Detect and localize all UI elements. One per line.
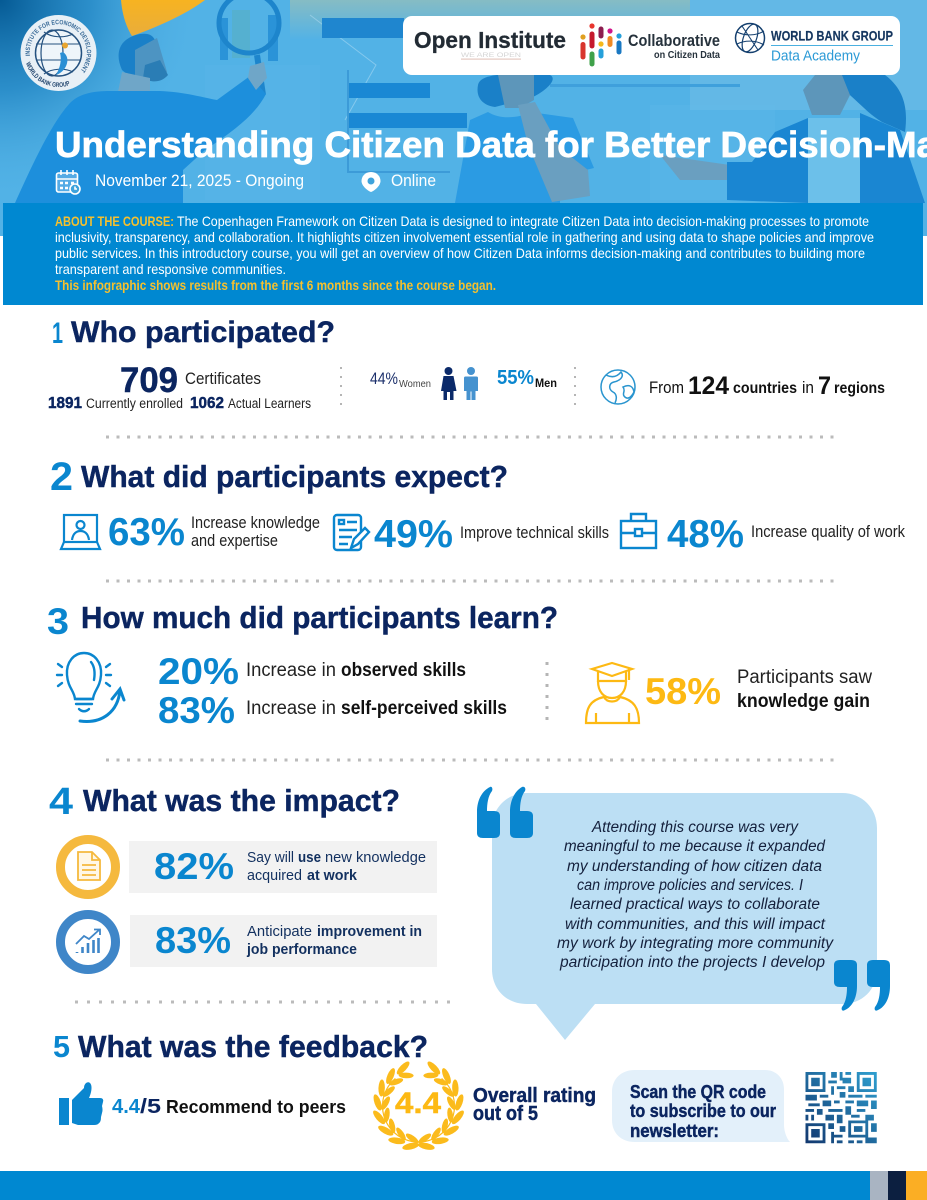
section 2 heading: What did participants expect? [81,459,508,494]
stat: gender split: Women [399,378,431,390]
quote text: participation into the projects I develop [559,954,825,971]
icon: document in yellow ring [60,840,116,894]
stat: observed skills: 20% [158,651,239,692]
logo: World Bank Group Data Academy [736,22,893,64]
stat: increase quality of work: 48% [667,513,744,556]
stat: certificates and enrolment [48,361,311,412]
icon: laptop with person [61,515,100,549]
stat: certificates and enrolment: 1062 [190,395,224,412]
panel: about the course: ABOUT THE COURSE: [55,213,174,229]
stat: gender split: Men [535,378,557,390]
icon: calendar [56,170,80,194]
panel: about the course: transparent and responsive communities. [55,261,286,277]
stat: recommend to peers [59,1082,346,1125]
logo: institute seal [20,15,96,91]
stat: countries and regions: countries [733,380,797,397]
stat: knowledge gain: 58% [645,671,721,712]
logo: Open Institute: WE ARE OPEN [461,53,521,59]
overall rating label: out of 5 [473,1103,538,1125]
logo: institute seal: INSTITUTE FOR ECONOMIC DEVELOPMENT [25,20,92,74]
stat: certificates and enrolment: 1891 [48,395,82,412]
icon: location pin [362,172,380,192]
stat row: improvement in job performance: Anticipate [247,923,312,940]
stat: gender split: 55% [497,367,534,389]
logo: institute seal: WORLD BANK GROUP [26,62,70,87]
stat: self-perceived skills: Increase in [246,698,336,719]
header banner [0,0,927,240]
stat row: improvement in job performance: 83% [155,920,231,961]
logo: Open Institute: Open Institute [414,27,566,53]
stat: observed skills [158,651,466,692]
stat: increase knowledge [61,511,320,554]
stat: countries and regions: in [802,379,814,397]
quote text: can improve policies and services. I [577,877,804,894]
stat: improve technical skills [334,513,609,556]
quote text: my understanding of how citizen data [567,858,822,875]
stat row: use knowledge at work: acquired [247,867,302,884]
icon: growth chart in blue ring [60,914,116,970]
overall rating label [473,1085,596,1125]
section 3 heading: 3 [47,601,69,642]
section 2 heading: 2 [50,455,73,499]
newsletter callout [612,1070,790,1142]
stat: observed skills: Increase in [246,660,336,681]
footer bar [0,1171,927,1200]
quote text: Attending this course was very [591,819,799,836]
stat: recommend to peers: 4.4 [112,1096,141,1118]
stat: knowledge gain: Participants saw [737,667,872,688]
section 3 heading: How much did participants learn? [81,600,558,635]
testimonial speech bubble [477,787,890,1040]
overall rating label: Overall rating [473,1085,596,1107]
stat: increase knowledge: Increase knowledge [191,514,320,532]
stat: countries and regions: From [649,379,684,397]
logo: Collaborative on Citizen Data: Collaborative [628,31,720,50]
newsletter callout: newsletter: [630,1121,719,1141]
stat row: use knowledge at work: Say will [247,849,294,866]
panel: about the course: public services. In this introductory course, you will get an overview of how Citizen Data informs decision-making and contributes to building more [55,245,865,261]
quote text: meaningful to me because it expanded [564,838,826,855]
icon: globe [601,370,635,404]
stat: improve technical skills: 49% [374,513,453,556]
icon: graduate [586,663,639,723]
section 5 heading: 5 [53,1029,70,1064]
badge: laurel wreath rating: 4.4 [395,1087,441,1120]
section 1 heading: Who participated? [71,316,335,349]
quote text [557,819,834,971]
badge: laurel wreath rating [370,1059,467,1154]
stat row: improvement in job performance [60,914,437,970]
stat row: use knowledge at work: 82% [154,846,234,887]
icon: form with pencil [334,515,369,550]
stat: knowledge gain: knowledge gain [737,691,870,712]
stat: self-perceived skills: self-perceived skills [341,698,507,719]
stat row: improvement in job performance: improvement in [317,923,422,940]
logo: World Bank Group Data Academy: WORLD BANK GROUP [771,28,893,44]
stat: increase quality of work: Increase quality of work [751,523,906,541]
section 1 heading: 1 [52,317,63,350]
logo: Collaborative on Citizen Data [580,23,720,64]
stat row: use knowledge at work [60,840,437,894]
logo: Collaborative on Citizen Data: on Citizen Data [654,49,720,61]
quote text: my work by integrating more community [557,935,834,952]
quote text: with communities, and this will impact [565,916,826,933]
stat: self-perceived skills: 83% [158,690,235,731]
stat: knowledge gain [645,667,872,712]
stat: certificates and enrolment: Currently enrolled [86,396,183,411]
icon: opening quote [477,787,533,838]
QR code [806,1072,877,1143]
stat: gender split: 44% [370,369,398,388]
icon: closing quote [834,960,890,1011]
panel: about the course: This infographic shows results from the first 6 months since the course began. [55,277,496,293]
newsletter callout: Scan the QR code [630,1082,766,1102]
title: Understanding Citizen Data for Better Decision-Ma [55,124,927,165]
stat row: use knowledge at work: new knowledge [325,849,426,866]
stat: certificates and enrolment: Actual Learners [228,396,311,411]
icon: woman [441,367,456,400]
stat: observed skills: observed skills [341,660,466,681]
stat: improve technical skills: Improve technical skills [460,524,609,542]
event date: November 21, 2025 - Ongoing [95,172,304,190]
icon: briefcase [621,514,656,548]
stat row: improvement in job performance: job performance [246,941,357,958]
stat: recommend to peers: Recommend to peers [166,1096,346,1117]
icon: man [464,367,478,400]
stat: recommend to peers: /5 [140,1096,161,1118]
stat: countries and regions: regions [834,380,885,397]
logo: World Bank Group Data Academy: Data Academy [771,48,860,64]
stat: increase quality of work [621,513,906,556]
quote text: learned practical ways to collaborate [570,896,820,913]
partner logos panel [403,16,900,75]
stat row: use knowledge at work: use [298,849,321,866]
panel: about the course [3,203,923,305]
stat row: use knowledge at work: at work [307,867,358,884]
section 4 heading: 4 [49,781,73,823]
stat: self-perceived skills [158,690,507,731]
newsletter callout: to subscribe to our [630,1101,776,1121]
section 5 heading: What was the feedback? [78,1029,428,1064]
icon: light bulb with arrow [57,653,124,721]
stat: increase knowledge: 63% [108,511,185,554]
stat: countries and regions: 7 [818,372,831,400]
stat: gender split [370,367,557,400]
icon: thumbs up [59,1082,103,1125]
section 4 heading: What was the impact? [83,783,400,818]
stat: increase knowledge: and expertise [191,532,278,550]
stat: countries and regions: 124 [688,372,729,400]
stat: countries and regions [649,372,885,400]
event location: Online [391,172,436,190]
stat: certificates and enrolment: 709 [120,361,178,400]
stat: certificates and enrolment: Certificates [185,370,261,388]
